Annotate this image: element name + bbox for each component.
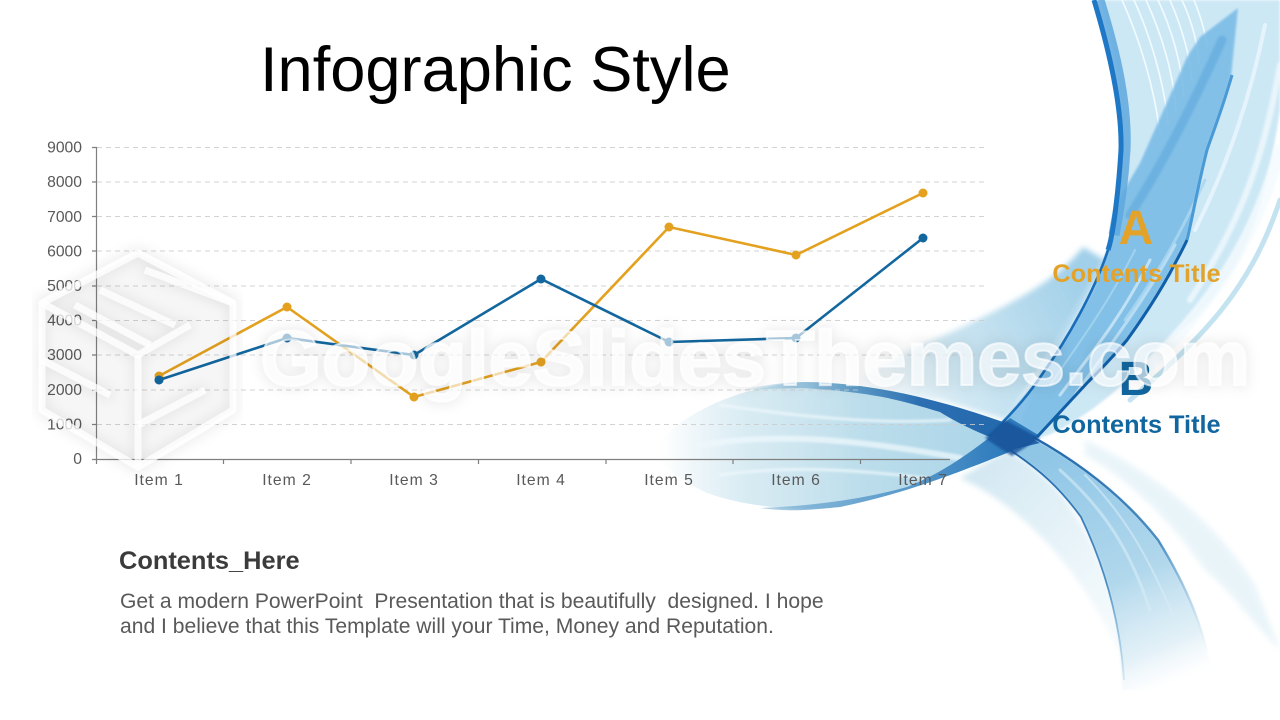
y axis labels: 5000 [47,278,82,295]
wave: rising lower ribbon [760,418,1040,510]
x axis labels: Item 7 [898,472,948,489]
series A orange line [154,188,928,402]
wave: dark edges [1000,0,1232,680]
y axis labels: 1000 [47,416,82,434]
body text: and I believe that this Template will your Time, Money and Reputation. [120,615,774,638]
legend A [1052,202,1221,288]
legend A: Contents Title [1052,260,1221,288]
wave: pale right stream [1010,0,1280,450]
y axis labels: 0 [73,451,82,468]
legend B [1052,353,1221,439]
wave: pale leaf shape [650,382,1040,509]
x axis labels: Item 5 [644,472,694,489]
wave: leaf highlights [700,405,960,478]
body text [120,590,824,638]
contents heading: Contents_Here [119,547,300,575]
series B blue line [154,234,928,384]
wave: pale right lower highlights [1130,25,1280,400]
wave: left pale fan [840,247,1105,420]
body text: Get a modern PowerPoint Presentation that is beautifully designed. I hope [120,590,824,613]
y axis labels: 9000 [47,140,82,156]
legend A: A [1119,202,1153,255]
x axis labels: Item 3 [389,472,439,489]
wave: top descending ribbon [740,382,1040,450]
legend B: B [1119,353,1153,406]
wave: pale stream under crossing [960,450,1122,660]
y axis labels: 7000 [47,209,82,226]
x axis labels [134,472,948,489]
line chart [47,140,988,489]
y axis labels: 6000 [47,244,82,260]
x axis labels: Item 1 [134,472,184,489]
wave: mid blue diagonal ribbon [1000,8,1238,437]
wave: falling ribbon highlights [1060,470,1175,620]
axes [92,148,950,464]
legend B: Contents Title [1052,411,1221,439]
wave: ribbon streaks [1050,40,1222,395]
y axis labels: 8000 [47,174,82,191]
y axis labels: 3000 [47,347,82,364]
gridlines [97,148,988,424]
x axis labels: Item 2 [262,472,312,489]
x axis labels: Item 4 [516,472,566,489]
y axis labels: 2000 [47,382,82,399]
wave: falling ribbon body [1005,432,1215,690]
y axis labels [47,140,82,468]
y axis labels: 4000 [47,312,82,330]
watermark logo [42,253,233,467]
wave: dark crossing [985,420,1040,456]
wave: faint outer stream [1085,440,1280,650]
decorative blue wave [650,0,1280,690]
title: Infographic Style [260,35,731,105]
wave: top white streak lines [1122,0,1207,135]
x axis labels: Item 6 [771,472,821,489]
watermark text: GoogleSlidesThemes.com [260,314,1250,402]
